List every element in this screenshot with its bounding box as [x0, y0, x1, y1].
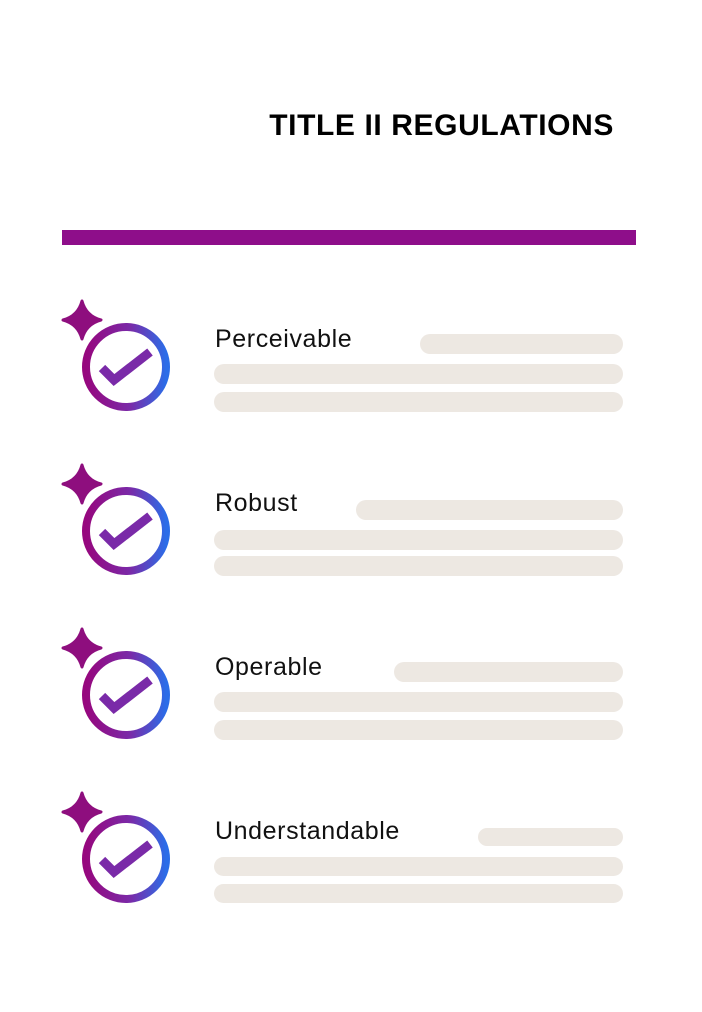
text placeholder bars: [214, 662, 623, 740]
icon: check circle: [62, 628, 170, 739]
icon: check circle: [62, 464, 170, 575]
label: Understandable: [215, 817, 400, 845]
text placeholder bars: [214, 500, 623, 576]
label: Robust: [215, 489, 298, 517]
header band: [62, 230, 636, 245]
text placeholder bars: [214, 828, 623, 903]
item: Robust: [62, 464, 623, 576]
title: TITLE II REGULATIONS: [269, 109, 614, 142]
text placeholder bars: [214, 334, 623, 412]
item: Understandable: [62, 792, 623, 903]
item: Perceivable: [62, 300, 623, 412]
icon: check circle: [62, 792, 170, 903]
label: Perceivable: [215, 325, 352, 353]
icon: check circle: [62, 300, 170, 411]
label: Operable: [215, 653, 323, 681]
item: Operable: [62, 628, 623, 740]
